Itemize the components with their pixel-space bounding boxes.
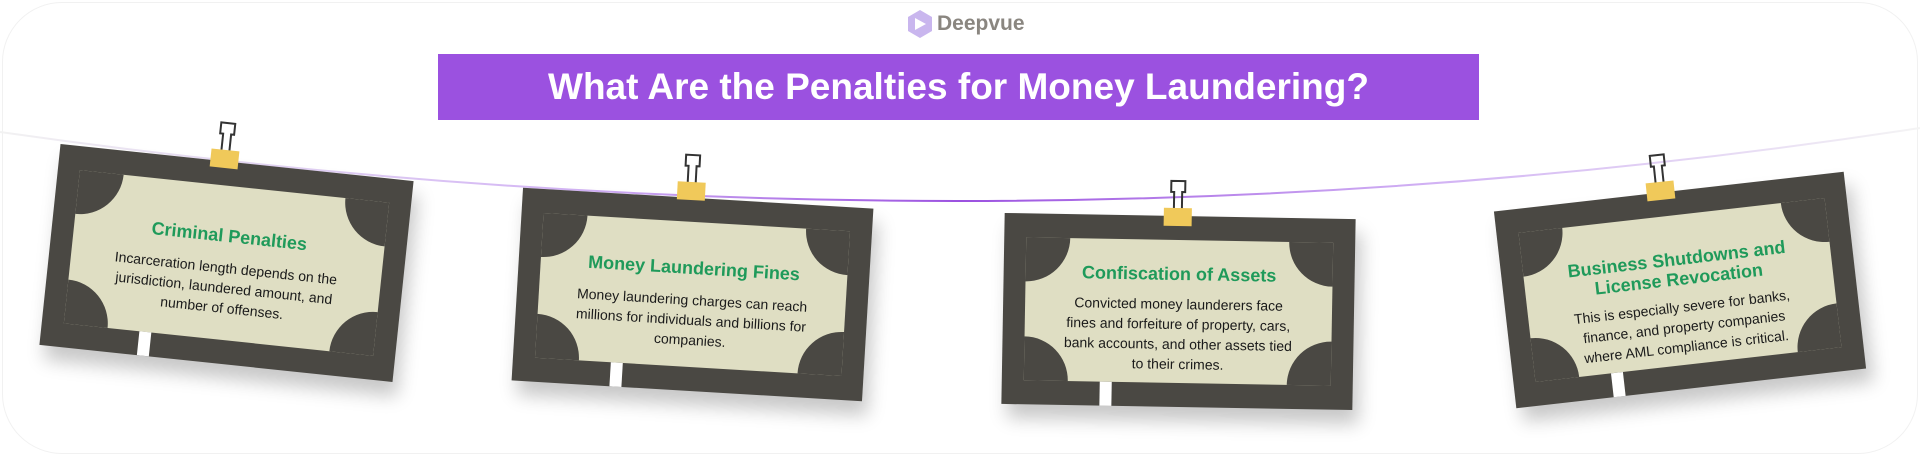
- card: Confiscation of Assets: Convicted money launderers face fines and forfeiture of property, cars, bank accounts, and other assets tied to their crimes.: [1064, 294, 1292, 373]
- clip 1: [210, 121, 240, 170]
- clip 2: [676, 154, 706, 201]
- card: Confiscation of Assets: Confiscation of Assets: [1082, 262, 1277, 286]
- logo: Deepvue: [937, 12, 1025, 35]
- card: Money Laundering Fines: [512, 188, 873, 401]
- card: Criminal Penalties: Incarceration length depends on the jurisdiction, laundered amount, and number of offenses.: [114, 248, 338, 322]
- title: [438, 54, 1479, 120]
- title: What Are the Penalties for Money Laundering?: [548, 66, 1369, 107]
- card: Money Laundering Fines: Money laundering charges can reach millions for individuals and billions for companies.: [576, 285, 808, 350]
- clip 4: [1646, 153, 1676, 202]
- card: Criminal Penalties: [39, 144, 414, 382]
- icon: logo hexagon: [908, 10, 932, 38]
- card: Criminal Penalties: Criminal Penalties: [151, 218, 308, 254]
- logo: [908, 10, 1025, 38]
- card: Business Shutdowns: [1494, 172, 1866, 408]
- card: Confiscation of Assets: [1001, 213, 1356, 410]
- card: Business Shutdowns: Business Shutdowns and: [1567, 237, 1786, 282]
- card: Business Shutdowns: License Revocation: [1594, 260, 1764, 299]
- card: Business Shutdowns: This is especially severe for banks, finance, and property companies where AML compliance is critical.: [1573, 287, 1791, 366]
- card: Money Laundering Fines: Money Laundering Fines: [588, 252, 800, 284]
- clip 3: [1164, 180, 1192, 226]
